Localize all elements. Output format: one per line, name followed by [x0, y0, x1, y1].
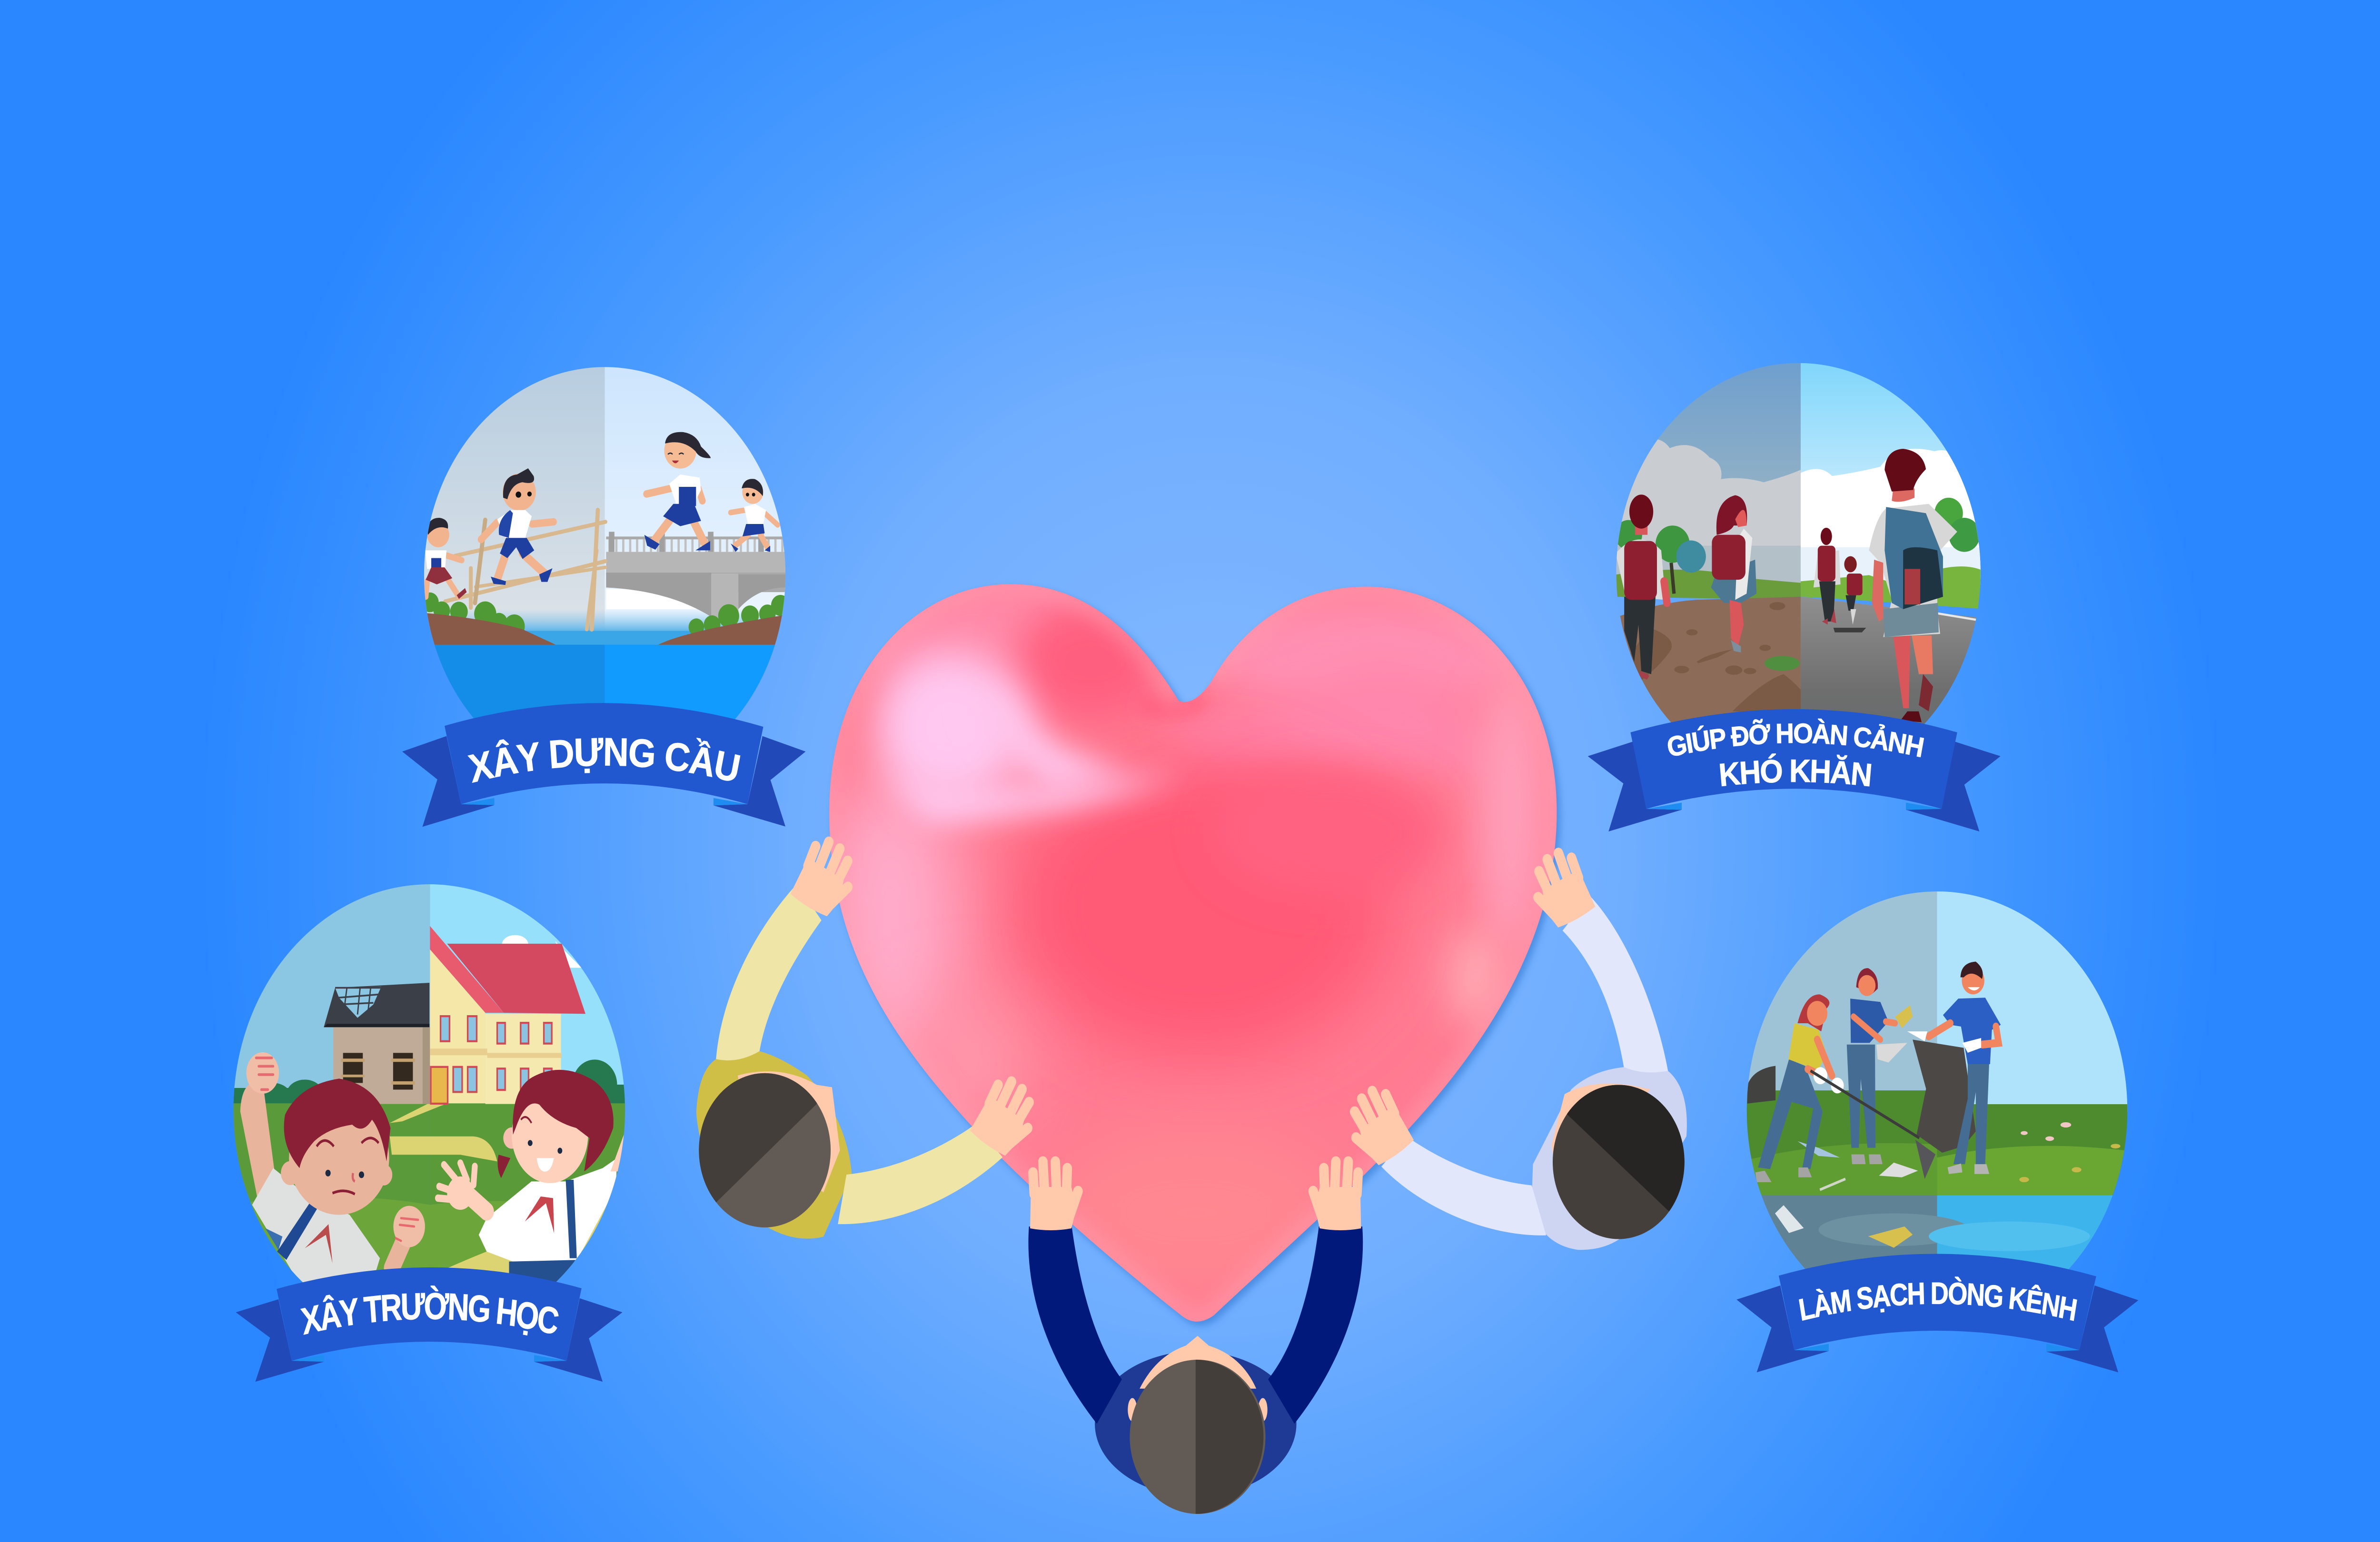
- tree left: [1615, 520, 1706, 593]
- head: [1130, 1360, 1266, 1514]
- volunteer in blue: [1847, 968, 1913, 1164]
- ribbon: giúp đỡ hoàn cảnh khó khăn: GIÚP ĐỠ HOÀN CẢNH: [1665, 718, 1925, 763]
- ribbon: giúp đỡ hoàn cảnh khó khăn: [1588, 709, 2001, 831]
- illustration: old and new school: [231, 881, 632, 1322]
- tree right: [1934, 498, 1980, 552]
- ribbon: xây trường học: XÂY TRƯỜNG HỌC: [298, 1285, 561, 1343]
- volunteer in yellow: [1755, 994, 1844, 1182]
- hand upper: [790, 835, 860, 921]
- ribbon: làm sạch dòng kênh: [1736, 1254, 2138, 1373]
- ribbon: làm sạch dòng kênh: LÀM SẠCH DÒNG KÊNH: [1796, 1275, 2079, 1327]
- panel: làm sạch dòng kênh: [1736, 889, 2138, 1373]
- girl: [438, 1070, 625, 1285]
- heart body: [806, 562, 1587, 1343]
- heart: [806, 562, 1587, 1343]
- heart shadow: [833, 588, 1560, 1325]
- person: bottom, navy shirt: [1028, 1162, 1363, 1514]
- trash bag: [1913, 1039, 1976, 1153]
- person: left, yellow shirt: [649, 835, 1041, 1244]
- hand right: [1313, 1162, 1361, 1230]
- illustration: canal clean-up: [1743, 889, 2131, 1281]
- illustration: children walking to school: [1613, 362, 1986, 786]
- body and arms: [1028, 1226, 1363, 1514]
- volunteer man: [1907, 961, 2001, 1174]
- hand lower: [1342, 1083, 1415, 1171]
- ribbon: giúp đỡ hoàn cảnh khó khăn: KHÓ KHĂN: [1717, 752, 1873, 793]
- hand upper: [1527, 847, 1596, 932]
- body and arms: [649, 884, 1002, 1244]
- panel: giúp đỡ hoàn cảnh khó khăn: [1588, 362, 2001, 831]
- ribbon: xây trường học: [236, 1267, 623, 1382]
- panel: xây dựng cầu: [402, 365, 805, 827]
- body and arms: [1381, 896, 1736, 1253]
- illustration: bridge before and after: [420, 365, 790, 800]
- ribbon: xây dựng cầu: XÂY DỰNG CẦU: [466, 730, 743, 791]
- boy: [240, 1052, 425, 1288]
- hand left: [1030, 1162, 1078, 1230]
- hand lower: [969, 1074, 1041, 1161]
- person: right, white shirt: [1342, 847, 1736, 1253]
- head: [649, 1043, 865, 1244]
- head: [1518, 1043, 1736, 1253]
- panel: xây trường học: [231, 881, 632, 1382]
- rake: [1811, 1071, 1935, 1179]
- ribbon: xây dựng cầu: [402, 703, 805, 827]
